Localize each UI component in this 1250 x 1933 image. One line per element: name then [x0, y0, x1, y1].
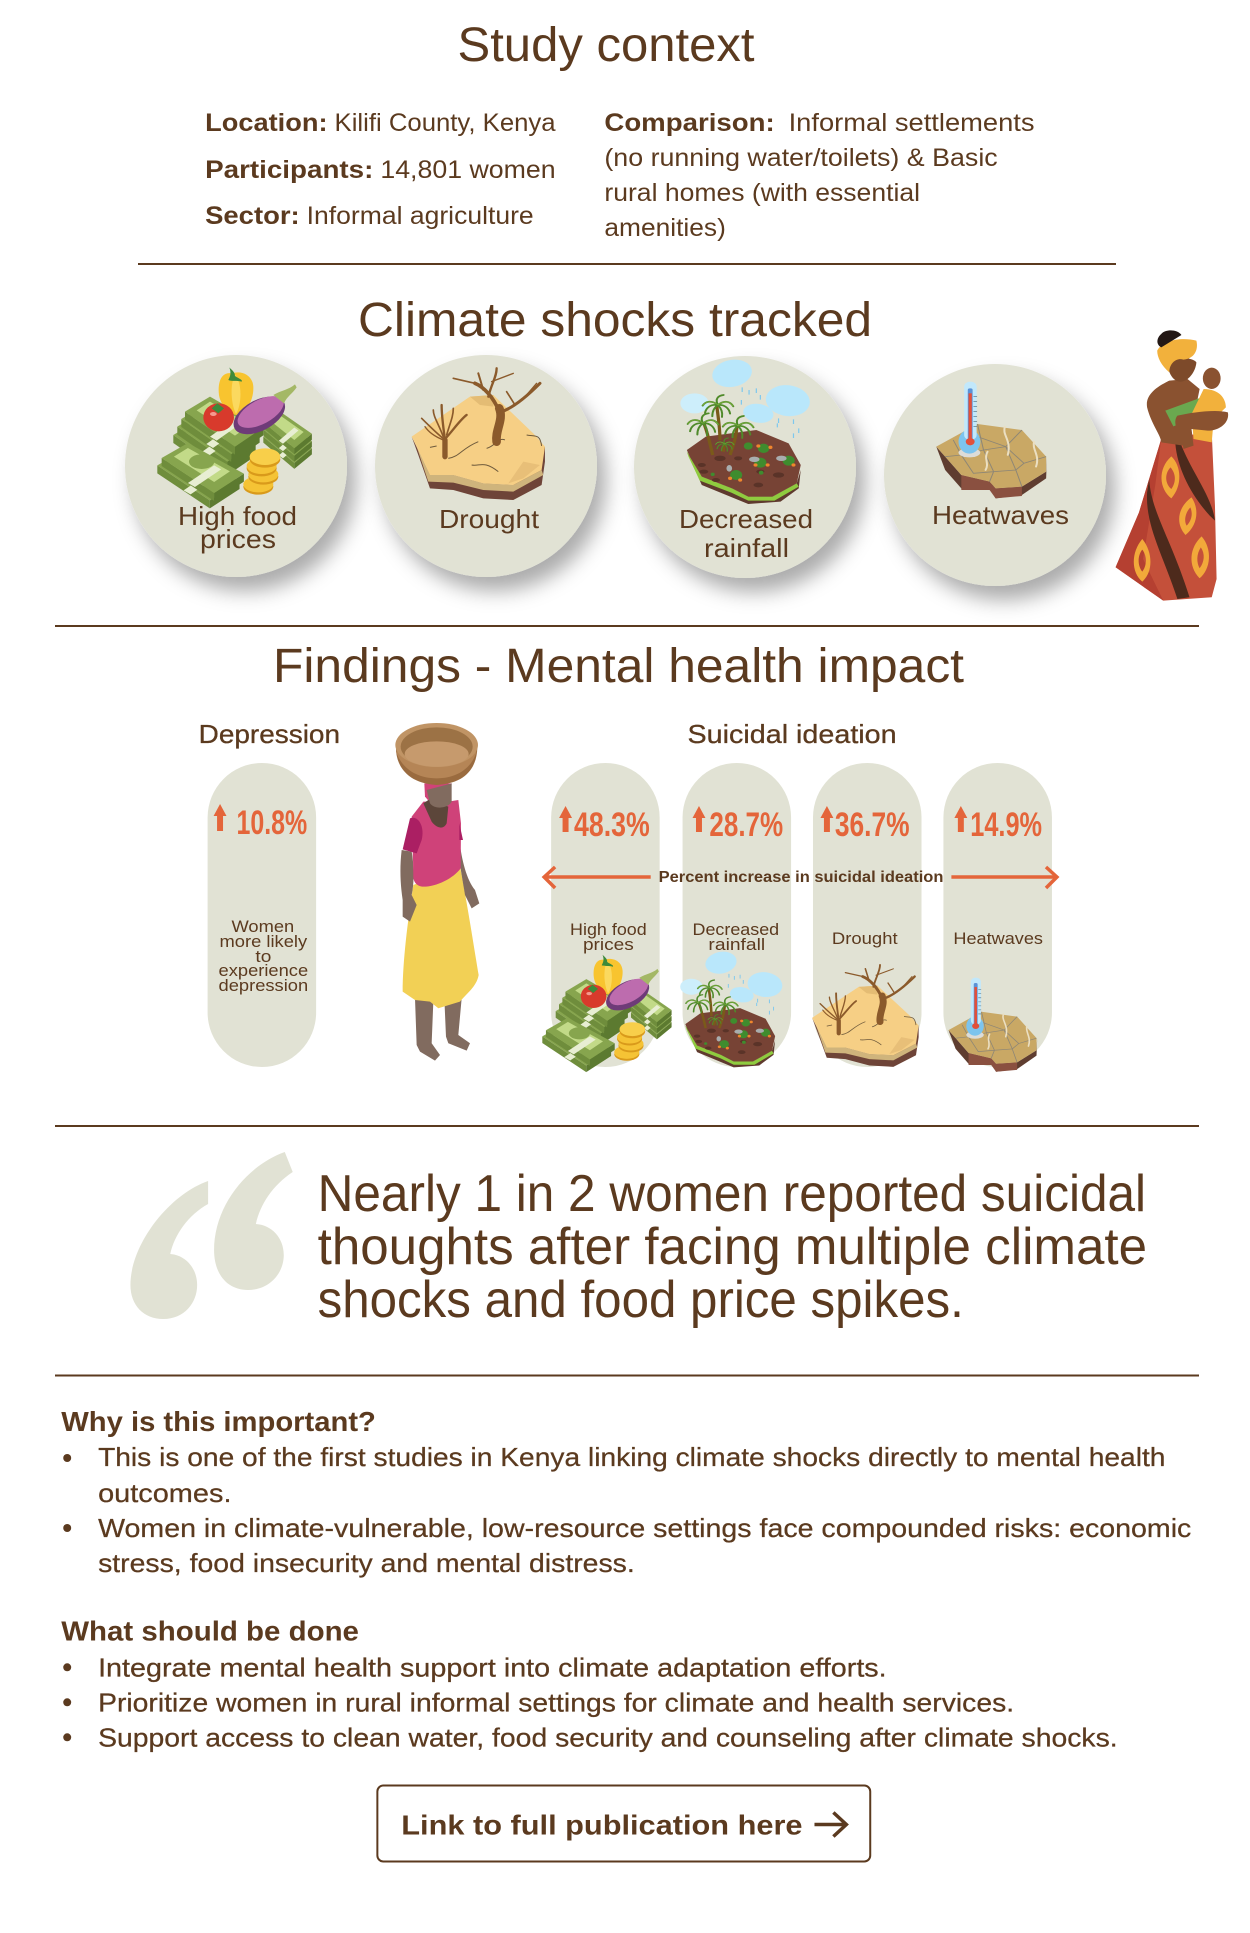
pill: decreased rainfall: Decreased	[693, 920, 779, 939]
circle: high food prices: High food	[178, 501, 297, 531]
illustration: woman carrying baby	[1116, 330, 1228, 601]
illustration: woman with basket	[395, 723, 479, 1061]
participants: Participants:	[205, 156, 373, 184]
bullet list: what: Integrate mental health support into climate adaptation efforts.	[98, 1654, 887, 1682]
pill: high food prices: 48.3%	[574, 806, 650, 844]
circle: heatwaves	[884, 364, 1106, 586]
depression label: Depression	[199, 721, 340, 749]
quote text: shocks and food price spikes.	[318, 1270, 964, 1328]
title: study context: Study context	[458, 19, 754, 72]
comparison: Comparison:	[604, 109, 775, 137]
panel: quote	[130, 1152, 1147, 1328]
circle: decreased rainfall: rainfall	[704, 533, 789, 563]
percent increase caption: Percent increase in suicidal ideation	[659, 869, 943, 886]
panel: why is this important	[61, 1406, 1191, 1578]
pill: drought	[812, 763, 922, 1067]
participants: 14,801 women	[380, 156, 556, 184]
depression caption: depression	[219, 976, 308, 995]
panel: study details	[205, 109, 1035, 242]
depression percent: 10.8%	[236, 804, 307, 842]
button: link to full publication	[377, 1786, 870, 1862]
suicidal ideation label: Suicidal ideation	[688, 721, 897, 749]
icon: quotation mark	[130, 1152, 293, 1319]
panel: suicidal ideation	[542, 721, 1057, 1072]
heading: what: What should be done	[61, 1615, 359, 1646]
pill: decreased rainfall: 28.7%	[709, 806, 783, 844]
bullet list: why: Women in climate-vulnerable, low-resource settings face compounded risks: economic	[98, 1515, 1191, 1543]
pill: drought: 36.7%	[835, 806, 910, 844]
pill: decreased rainfall: rainfall	[708, 935, 765, 954]
arrow: right	[951, 867, 1057, 888]
circle: drought: Drought	[439, 504, 540, 534]
depression caption: experience	[219, 961, 308, 980]
circle: decreased rainfall: Decreased	[679, 504, 813, 534]
circle: high food prices	[125, 355, 347, 577]
heading: findings: Findings - Mental health impact	[273, 640, 964, 693]
pill: heatwaves	[943, 763, 1052, 1072]
location: Location:	[205, 109, 328, 137]
comparison: amenities)	[604, 214, 726, 242]
depression caption: to	[255, 947, 271, 966]
heading: climate shocks tracked: Climate shocks tracked	[358, 294, 872, 347]
circle: heatwaves: Heatwaves	[932, 500, 1069, 530]
arrow up: depression	[214, 804, 227, 831]
location	[205, 109, 556, 137]
depression caption: more likely	[220, 932, 308, 951]
sector	[205, 202, 534, 230]
location: Kilifi County, Kenya	[335, 109, 556, 137]
depression caption: Women	[231, 917, 294, 936]
comparison: Informal settlements	[789, 109, 1035, 137]
bullet list: why	[63, 1444, 1191, 1578]
pill: drought: Drought	[832, 929, 898, 948]
panel: what should be done	[61, 1615, 1118, 1752]
participants	[205, 156, 556, 184]
bullet list: what: Support access to clean water, food security and counseling after climate shocks.	[98, 1724, 1118, 1752]
circle: high food prices: prices	[200, 524, 276, 554]
comparison: rural homes (with essential	[604, 179, 920, 207]
pill: high food prices: prices	[583, 935, 634, 954]
button: link to full publication: Link to full publication here	[401, 1809, 803, 1841]
arrow: left	[544, 867, 651, 888]
sector: Sector:	[205, 202, 300, 230]
pill: high food prices: High food	[570, 920, 647, 939]
pill: decreased rainfall	[680, 763, 791, 1067]
bullet list: why: stress, food insecurity and mental distress.	[98, 1550, 635, 1578]
bullet list: why: outcomes.	[98, 1480, 231, 1508]
circle: drought	[375, 355, 597, 577]
panel: climate shock circles	[125, 355, 1106, 586]
pill: heatwaves: 14.9%	[970, 806, 1042, 844]
quote text	[318, 1164, 1147, 1328]
pill: high food prices	[542, 763, 672, 1072]
bullet list: why: This is one of the first studies in Kenya linking climate shocks directly to mental health	[98, 1444, 1165, 1472]
circle: decreased rainfall	[634, 355, 856, 578]
pill: heatwaves: Heatwaves	[953, 929, 1043, 948]
heading: why: Why is this important?	[61, 1406, 376, 1437]
comparison: (no running water/toilets) & Basic	[604, 144, 998, 172]
quote text: thoughts after facing multiple climate	[318, 1217, 1147, 1275]
depression caption	[219, 917, 308, 995]
bullet list: what	[63, 1654, 1118, 1752]
quote text: Nearly 1 in 2 women reported suicidal	[318, 1164, 1146, 1222]
pill: depression	[208, 763, 316, 1067]
sector: Informal agriculture	[307, 202, 534, 230]
panel: depression	[199, 721, 340, 1067]
comparison	[604, 109, 1035, 242]
bullet list: what: Prioritize women in rural informal settings for climate and health services.	[98, 1689, 1014, 1717]
